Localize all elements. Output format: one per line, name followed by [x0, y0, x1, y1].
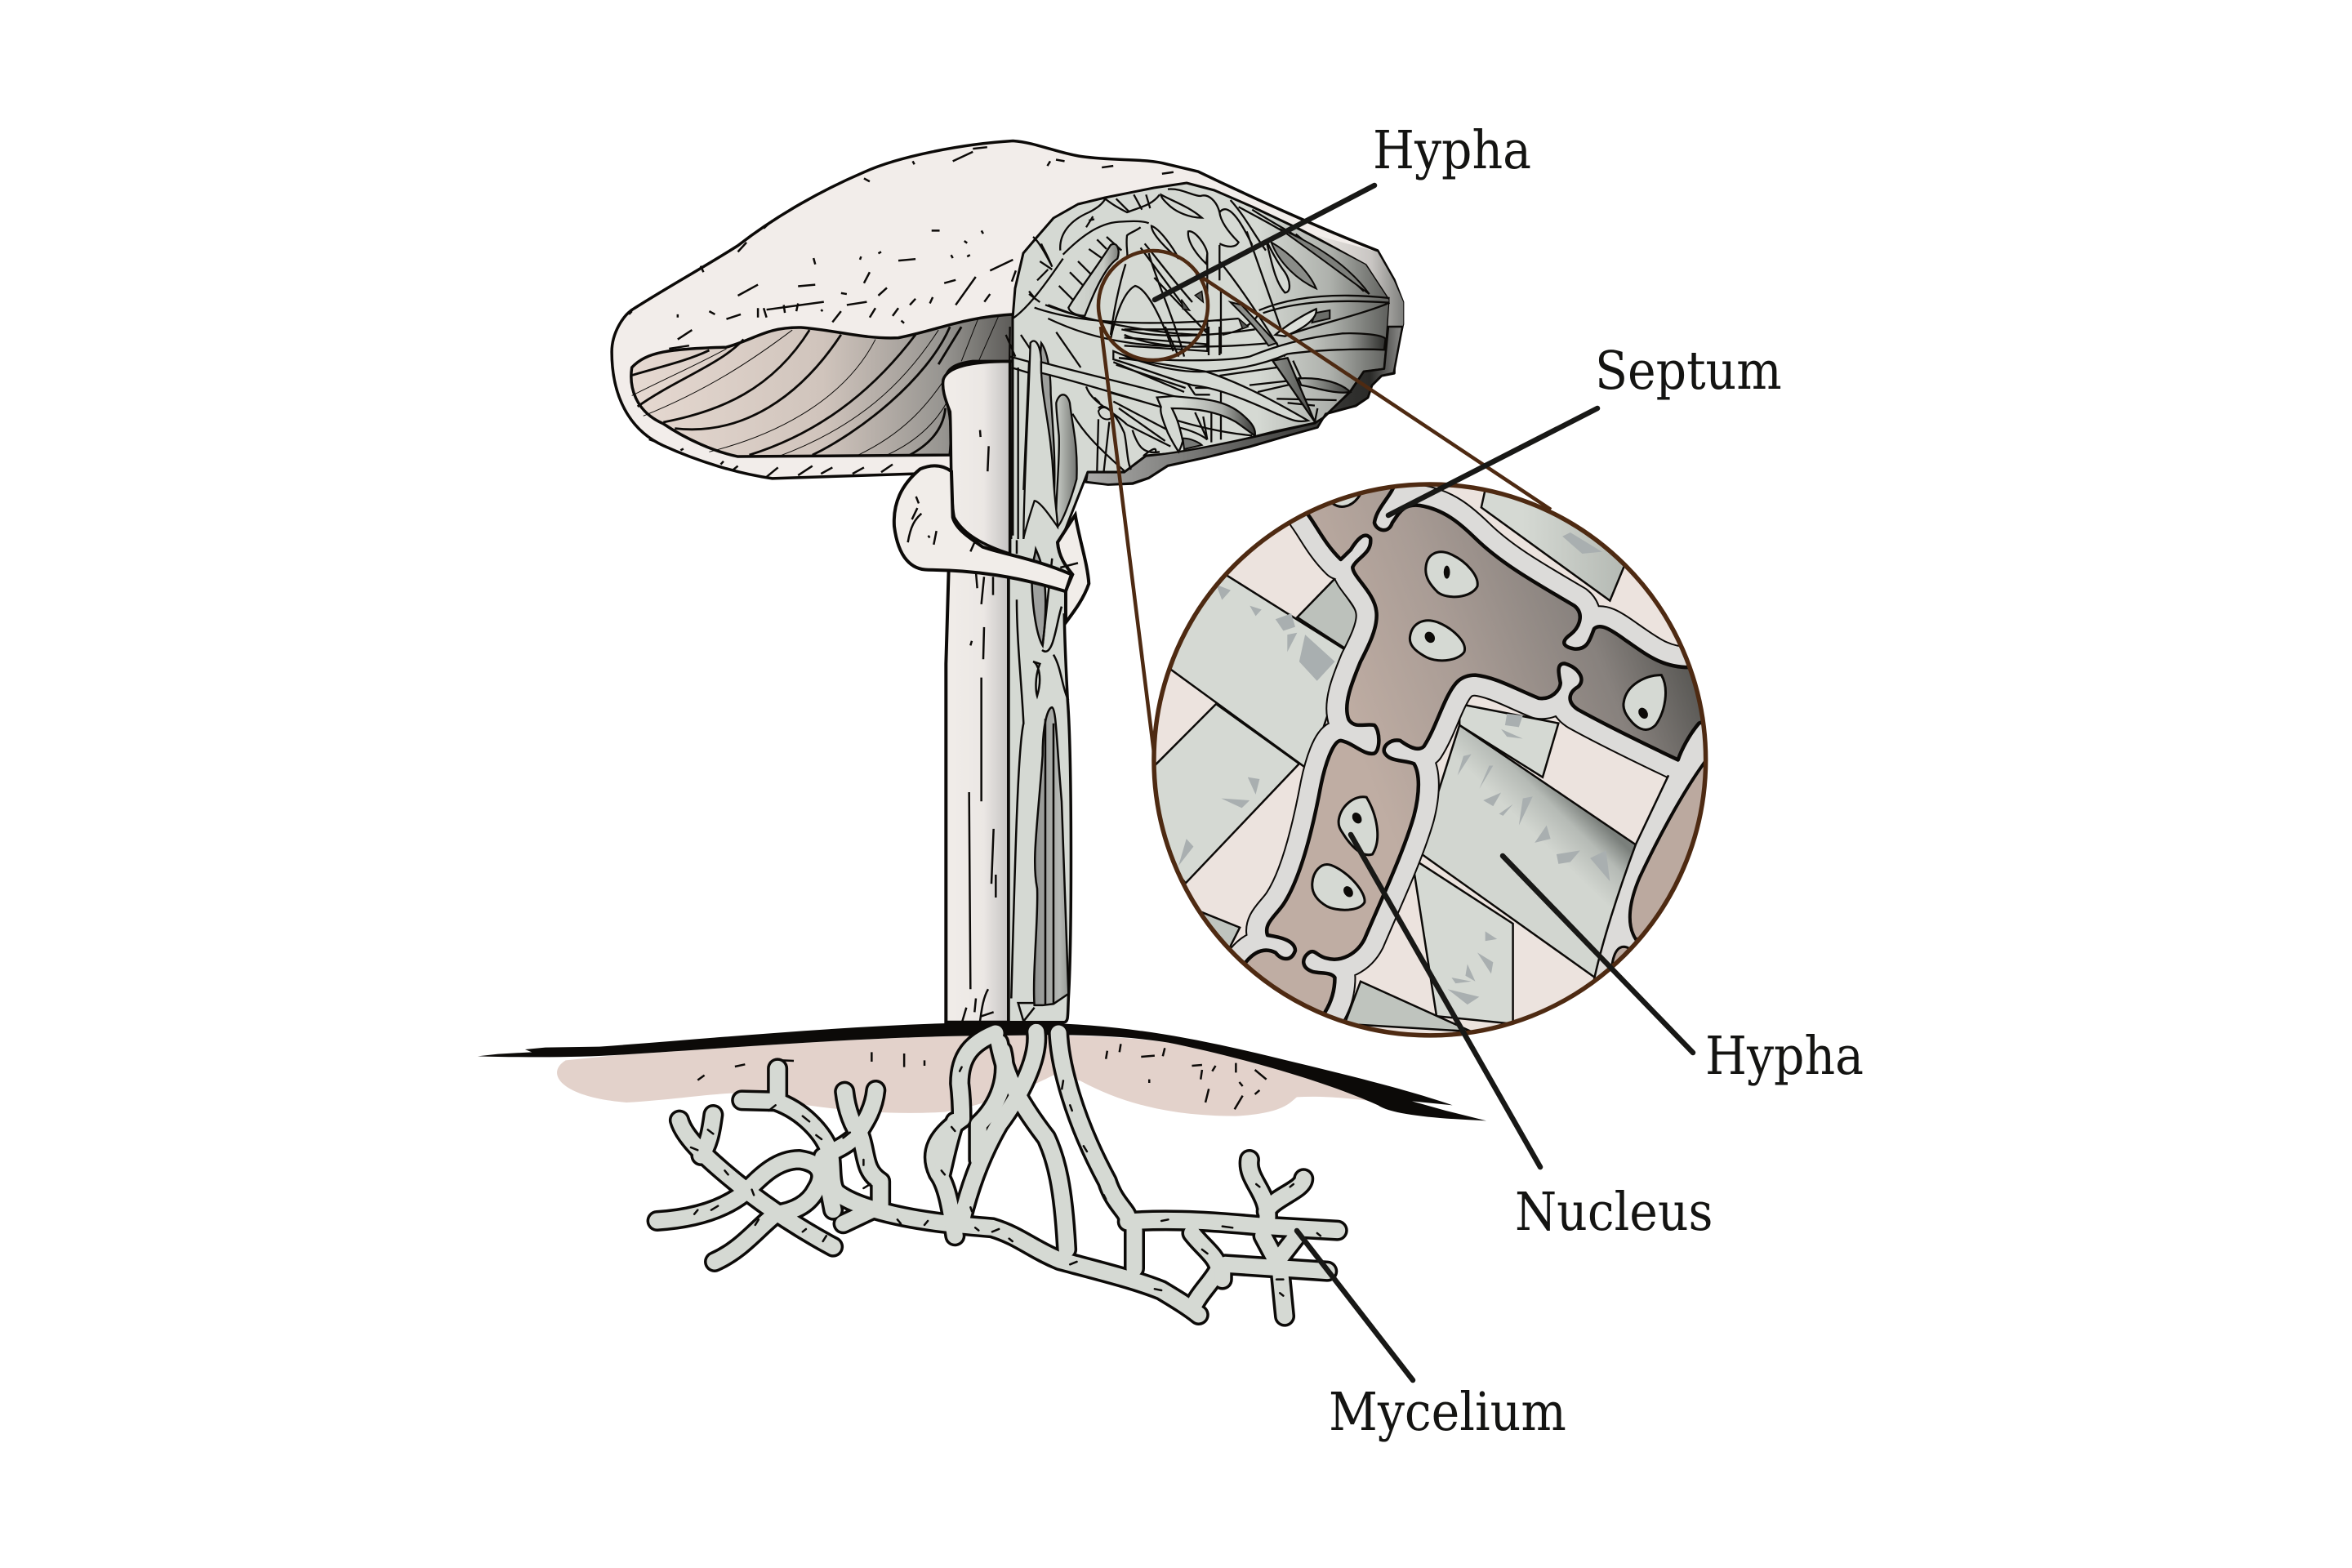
nucleus 3: [1624, 675, 1666, 729]
nucleolus 2: [1424, 632, 1435, 644]
detail cells clipped to circle: [1156, 487, 1704, 1033]
tall tube dark slot: [1040, 343, 1054, 509]
pointer: septum: [1388, 408, 1597, 515]
dark streak: [1272, 243, 1316, 288]
hypha lines upper: [1013, 189, 1390, 357]
nucleoli: [1342, 566, 1650, 899]
pointer: nucleus: [1351, 835, 1540, 1167]
stem dark slot: [1031, 550, 1045, 645]
cap: [612, 141, 1403, 484]
stem collar and ring: [894, 361, 1089, 1022]
light lens: [1276, 309, 1316, 336]
cap outline: [612, 141, 1403, 484]
right tube: [1298, 378, 1350, 393]
hypha wall outer outline: [1231, 487, 1679, 1020]
stem upper collar: [943, 361, 1010, 554]
section hyphae lower: [1006, 327, 1386, 539]
mycelium: [657, 1031, 1338, 1316]
dark streak top right: [1280, 229, 1370, 294]
nucleolus 3: [1638, 707, 1648, 719]
right wall outline: [1594, 775, 1668, 979]
pointer: mycelium: [1297, 1231, 1413, 1380]
ground line: [478, 1022, 1486, 1120]
pale cell panels: [1151, 480, 1642, 1031]
dark tube diagonal: [1231, 302, 1276, 345]
mushroom: [612, 141, 1403, 1022]
pointer lines: [1155, 185, 1693, 1380]
cap texture: [629, 147, 1174, 477]
nucleolus 4: [1352, 813, 1362, 823]
stem right half: [1009, 514, 1076, 1022]
magnifier connector lines: [1098, 251, 1551, 760]
slot lens left: [1161, 194, 1202, 218]
small dark tube: [1183, 439, 1202, 449]
curved tube: [1068, 244, 1119, 316]
stem left half: [946, 563, 1009, 1022]
slot lens right: [1188, 231, 1207, 264]
branch tube: [1157, 396, 1255, 452]
detail circle border: [1154, 484, 1706, 1036]
tall tube: [1023, 341, 1058, 539]
stem texture: [962, 430, 996, 1022]
hypha wall: [1222, 480, 1709, 1040]
section outer band and rim: [1086, 234, 1403, 484]
connector left: [1101, 327, 1155, 760]
stem right outline: [1009, 536, 1071, 1022]
horizontal tube: [1041, 362, 1174, 408]
stem vertical lines: [1011, 540, 1068, 1022]
soil patch: [557, 1036, 1371, 1116]
connector right: [1196, 274, 1551, 510]
nucleus 1: [1426, 552, 1477, 597]
smudges: [1178, 532, 1610, 1004]
section hyphae upper: [1013, 189, 1390, 357]
big tube right: [1119, 333, 1386, 372]
right cell wall: [1596, 751, 1704, 978]
dark slot: [1056, 394, 1077, 527]
small blob: [1098, 408, 1113, 419]
nucleolus 5: [1343, 886, 1353, 897]
dark diagonal: [1272, 358, 1315, 422]
light tube: [1266, 239, 1290, 292]
gill lines thin: [632, 316, 999, 457]
pink background: [1156, 487, 1678, 1033]
soil specks: [697, 1044, 1267, 1109]
nucleus 4: [1339, 797, 1378, 855]
slot lens mid: [1152, 226, 1178, 259]
label: Mycelium: Mycelium: [1329, 1382, 1566, 1443]
magnified hypha detail: [1152, 482, 1708, 1038]
label: Septum: Septum: [1595, 341, 1782, 402]
nucleus 2: [1410, 621, 1465, 661]
right lower cell: [1628, 761, 1704, 941]
label: Nucleus: Nucleus: [1515, 1182, 1713, 1243]
dark slit: [1182, 292, 1248, 329]
mycelium specks: [691, 1067, 1321, 1296]
lower dark rim: [1086, 327, 1402, 484]
upper grey band: [1312, 234, 1403, 373]
soil: [478, 1022, 1486, 1316]
stem tube highlight: [1045, 719, 1054, 1005]
nucleolus 1: [1444, 566, 1450, 579]
ring texture: [908, 497, 1078, 568]
gill lines thick: [632, 327, 961, 455]
stem dark tubes: [1034, 707, 1068, 1005]
small magnifier ring: [1098, 251, 1208, 360]
label: Hypha: Hypha: [1705, 1026, 1864, 1087]
dark block: [1312, 310, 1330, 323]
gills: [631, 314, 1013, 457]
brown hypha cells: [1245, 488, 1701, 1013]
pointer: hypha right: [1503, 856, 1693, 1053]
stem: [946, 514, 1076, 1022]
hypha lines lower: [1006, 327, 1337, 539]
ring: [894, 466, 1071, 591]
top nucleus fragment: [1333, 492, 1361, 506]
ring right flap: [1058, 514, 1089, 622]
big tube left: [1113, 351, 1308, 421]
nuclei: [1312, 492, 1666, 910]
cut section background: [1013, 183, 1390, 539]
nucleus 5: [1312, 865, 1365, 910]
bottom corner cell: [1610, 946, 1629, 964]
label: Hypha: Hypha: [1373, 120, 1531, 181]
labels: [1329, 120, 1864, 1443]
pointer: hypha top: [1155, 185, 1374, 300]
